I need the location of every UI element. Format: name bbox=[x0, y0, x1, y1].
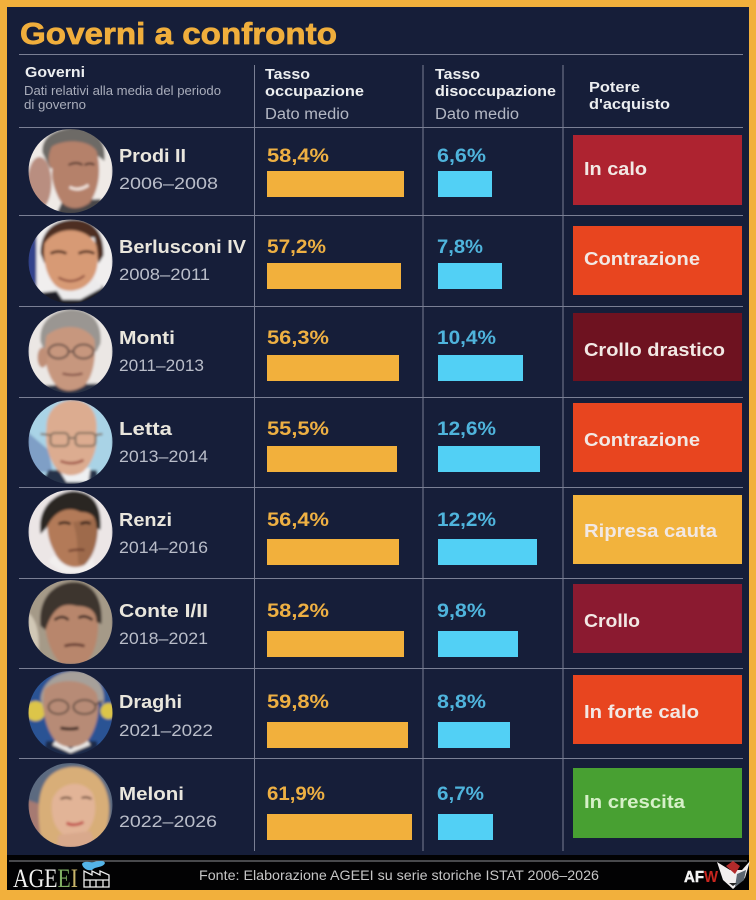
row: Letta: 2013–2014 bbox=[119, 448, 208, 466]
icon: fox head bbox=[717, 861, 750, 889]
row: Monti: Monti bbox=[119, 328, 175, 348]
row: Monti: Crollo drastico bbox=[584, 340, 725, 360]
icon: factory bbox=[84, 871, 109, 887]
column header: Potere d'acquisto bbox=[589, 80, 670, 113]
row: Conte I/II: 9,8% bbox=[437, 601, 486, 622]
logo: AFW fox bbox=[684, 861, 750, 889]
row: Conte I/II: 58,2% bbox=[267, 601, 329, 622]
row: Letta: 55,5% bbox=[267, 419, 329, 440]
row: Meloni bbox=[28, 762, 742, 848]
row: Conte I/II: Crollo bbox=[584, 611, 640, 631]
column header: Tasso disoccupazione: disoccupazione bbox=[435, 84, 556, 100]
column header: Tasso disoccupazione: Dato medio bbox=[435, 106, 519, 123]
row: Renzi: Ripresa cauta bbox=[584, 521, 718, 541]
column header: Governi: Dati relativi alla media del periodo bbox=[24, 84, 221, 98]
column header: Potere d'acquisto: Potere bbox=[589, 80, 640, 96]
row: Renzi: 12,2% bbox=[437, 510, 496, 531]
row: Berlusconi IV: 2008–2011 bbox=[119, 266, 210, 284]
row: Renzi: 56,4% bbox=[267, 510, 329, 531]
portrait: Draghi bbox=[26, 670, 116, 756]
portrait: Monti bbox=[28, 308, 114, 394]
footer bar bbox=[7, 855, 749, 890]
row: Letta: 12,6% bbox=[437, 419, 496, 440]
row: Berlusconi IV: Berlusconi IV bbox=[119, 237, 246, 257]
row: Berlusconi IV: 57,2% bbox=[267, 237, 326, 258]
portrait: Meloni bbox=[28, 762, 114, 848]
row: Letta: Contrazione bbox=[584, 430, 700, 450]
row: Prodi II: 58,4% bbox=[267, 146, 329, 167]
row: Letta bbox=[28, 399, 742, 485]
row: Prodi II: Prodi II bbox=[119, 146, 186, 166]
column header: Tasso occupazione: Tasso bbox=[265, 67, 310, 83]
title: Governi a confronto bbox=[20, 16, 337, 51]
column header: Tasso disoccupazione: Tasso bbox=[435, 67, 480, 83]
row: Meloni: 61,9% bbox=[267, 784, 325, 805]
row: Monti: 2011–2013 bbox=[119, 357, 204, 375]
column header: Governi bbox=[24, 65, 221, 112]
row: Renzi: 2014–2016 bbox=[119, 539, 208, 557]
row: Prodi II bbox=[28, 128, 742, 214]
row: Meloni: Meloni bbox=[119, 784, 184, 804]
row: Renzi bbox=[28, 489, 742, 575]
portrait: Berlusconi bbox=[28, 218, 114, 304]
row: Conte I/II: Conte I/II bbox=[119, 601, 208, 621]
row: Berlusconi IV: Contrazione bbox=[584, 249, 700, 269]
row: Draghi: 59,8% bbox=[267, 692, 329, 713]
row: Prodi II: 6,6% bbox=[437, 146, 486, 167]
logo: AGEEI: AGEEI bbox=[13, 864, 78, 893]
row: Prodi II: In calo bbox=[584, 159, 647, 179]
portrait: Letta bbox=[28, 399, 114, 485]
row: Meloni: 6,7% bbox=[437, 784, 484, 805]
row: Berlusconi IV: 7,8% bbox=[437, 237, 483, 258]
icon: blue cloud bbox=[82, 861, 105, 870]
source note: Fonte: Elaborazione AGEEI su serie storiche ISTAT 2006–2026 bbox=[199, 867, 599, 883]
column header: Potere d'acquisto: d'acquisto bbox=[589, 97, 670, 113]
portrait: Renzi bbox=[28, 489, 114, 575]
row: Meloni: In crescita bbox=[584, 792, 686, 812]
row: Conte I/II: 2018–2021 bbox=[119, 630, 208, 648]
column header: Governi: Governi bbox=[25, 65, 85, 81]
row: Monti bbox=[28, 308, 742, 394]
row: Letta: Letta bbox=[119, 419, 173, 439]
logo: AFW fox: AF bbox=[684, 869, 704, 886]
logo: AGEEI bbox=[13, 861, 109, 893]
portrait: Conte bbox=[28, 579, 114, 665]
column header: Tasso occupazione bbox=[265, 67, 364, 123]
column header: Governi: di governo bbox=[24, 98, 86, 112]
column header: Tasso disoccupazione bbox=[435, 67, 556, 123]
column header: Tasso occupazione: Dato medio bbox=[265, 106, 349, 123]
row: Draghi: 2021–2022 bbox=[119, 722, 213, 740]
row: Meloni: 2022–2026 bbox=[119, 813, 217, 831]
row: Renzi: Renzi bbox=[119, 510, 172, 530]
row: Prodi II: 2006–2008 bbox=[119, 175, 218, 193]
portrait: Prodi bbox=[28, 128, 114, 214]
column header: Tasso occupazione: occupazione bbox=[265, 84, 364, 100]
row: Draghi bbox=[26, 670, 742, 756]
row: Berlusconi IV bbox=[28, 218, 742, 304]
row: Monti: 56,3% bbox=[267, 328, 329, 349]
row: Draghi: Draghi bbox=[119, 692, 182, 712]
row: Conte I/II bbox=[28, 579, 742, 665]
row: Draghi: 8,8% bbox=[437, 692, 486, 713]
row: Draghi: In forte calo bbox=[584, 702, 699, 722]
logo: AFW fox: W bbox=[704, 869, 719, 886]
row: Monti: 10,4% bbox=[437, 328, 496, 349]
